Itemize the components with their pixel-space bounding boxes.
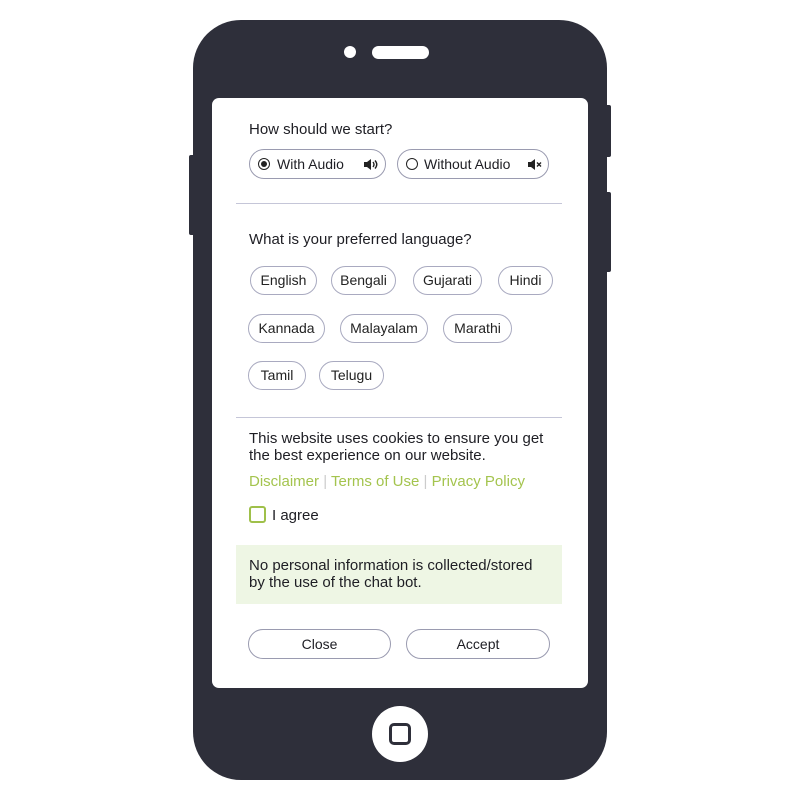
privacy note — [236, 545, 562, 604]
cookies text: This website uses cookies to ensure you get — [249, 430, 543, 447]
language chips — [248, 266, 553, 390]
divider — [236, 203, 562, 204]
language chips: Malayalam — [350, 320, 418, 336]
option: without audio — [397, 149, 549, 179]
divider — [236, 417, 562, 418]
side buttons right — [605, 105, 611, 157]
language chips: Kannada — [258, 320, 315, 336]
button: accept — [406, 629, 550, 659]
language chips: Marathi — [454, 320, 501, 336]
button: accept: Accept — [457, 636, 499, 652]
option: with audio — [249, 149, 386, 179]
language chips: Gujarati — [423, 272, 472, 288]
privacy note: No personal information is collected/stored — [249, 557, 532, 574]
speaker — [372, 46, 429, 59]
button: close: Close — [302, 636, 337, 652]
button: close — [248, 629, 391, 659]
language chips: Hindi — [510, 272, 541, 288]
option: with audio: With Audio — [277, 156, 344, 172]
option: without audio: Without Audio — [424, 156, 510, 172]
language chips: Telugu — [331, 367, 372, 383]
heading: language: What is your preferred language? — [249, 231, 472, 248]
language chips: Bengali — [340, 272, 387, 288]
language chips: Tamil — [261, 367, 293, 383]
phone body — [193, 20, 607, 780]
language chips: English — [261, 272, 306, 288]
heading: how should we start: How should we start? — [249, 121, 392, 138]
home button — [372, 706, 428, 762]
checkbox: I agree: I agree — [272, 507, 319, 524]
links: Disclaimer | Terms of Use | Privacy Policy — [249, 473, 525, 490]
cookies text: the best experience on our website. — [249, 447, 486, 464]
cookies text — [249, 430, 544, 464]
checkbox: I agree — [249, 506, 319, 524]
side button left — [189, 155, 195, 235]
screen — [212, 98, 588, 688]
camera — [344, 46, 356, 58]
privacy note: by the use of the chat bot. — [249, 574, 422, 591]
